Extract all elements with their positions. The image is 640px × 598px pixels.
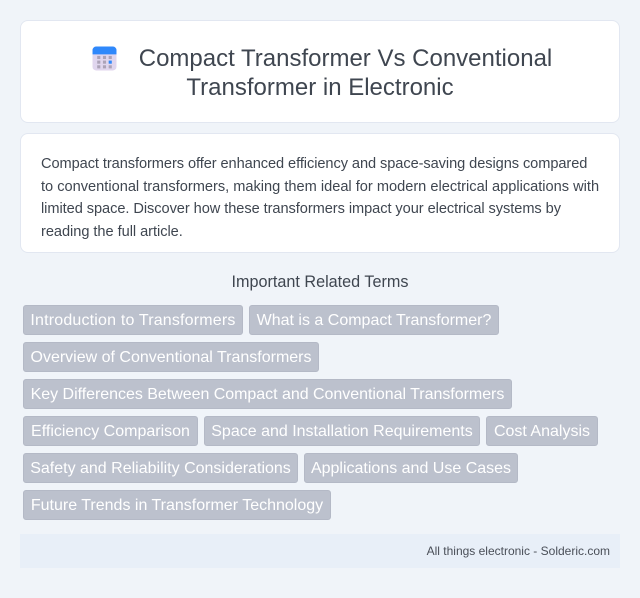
tag: future trends [23, 490, 331, 520]
tag: space and installation: Space and Installation Requirements [211, 423, 473, 440]
footer [20, 534, 620, 568]
tag: conventional overview [23, 342, 319, 372]
tag: key differences [23, 379, 512, 409]
text block: description: reading the full article. [41, 224, 183, 240]
tag: key differences: Key Differences Between Compact and Conventional Transformers [31, 386, 504, 403]
title [139, 45, 552, 101]
panel: title header [20, 20, 620, 123]
tag: cost analysis: Cost Analysis [494, 423, 590, 440]
tag: cost analysis [486, 416, 598, 446]
text block: description [41, 156, 599, 240]
footer text: All things electronic - Solderic.com [427, 544, 610, 558]
title: Transformer in Electronic [186, 74, 454, 101]
tag: efficiency: Efficiency Comparison [31, 423, 190, 440]
tag: space and installation [204, 416, 480, 446]
tag: compact transformer [249, 305, 499, 335]
tag: efficiency [23, 416, 198, 446]
title: Compact Transformer Vs Conventional [139, 45, 552, 72]
tag: future trends: Future Trends in Transformer Technology [31, 497, 323, 514]
tag: safety [23, 453, 298, 483]
text block: description: to conventional transformers, making them ideal for modern electrical applications with [41, 178, 599, 194]
icon: calendar [92, 46, 116, 70]
tag: applications [304, 453, 518, 483]
tag: compact transformer: What is a Compact Transformer? [257, 312, 491, 329]
tag: introduction [23, 305, 243, 335]
tag: applications: Applications and Use Cases [311, 460, 511, 477]
heading: important related terms: Important Related Terms [232, 273, 408, 291]
panel: related term tags [23, 305, 598, 520]
tag: safety: Safety and Reliability Considerations [30, 460, 291, 477]
text block: description: Compact transformers offer enhanced efficiency and space-saving designs compared [41, 156, 587, 172]
panel: description [20, 133, 620, 253]
tag: conventional overview: Overview of Conventional Transformers [30, 349, 312, 366]
text block: description: limited space. Discover how these transformers impact your electrical systems by [41, 201, 561, 217]
tag: introduction: Introduction to Transformers [30, 312, 236, 329]
